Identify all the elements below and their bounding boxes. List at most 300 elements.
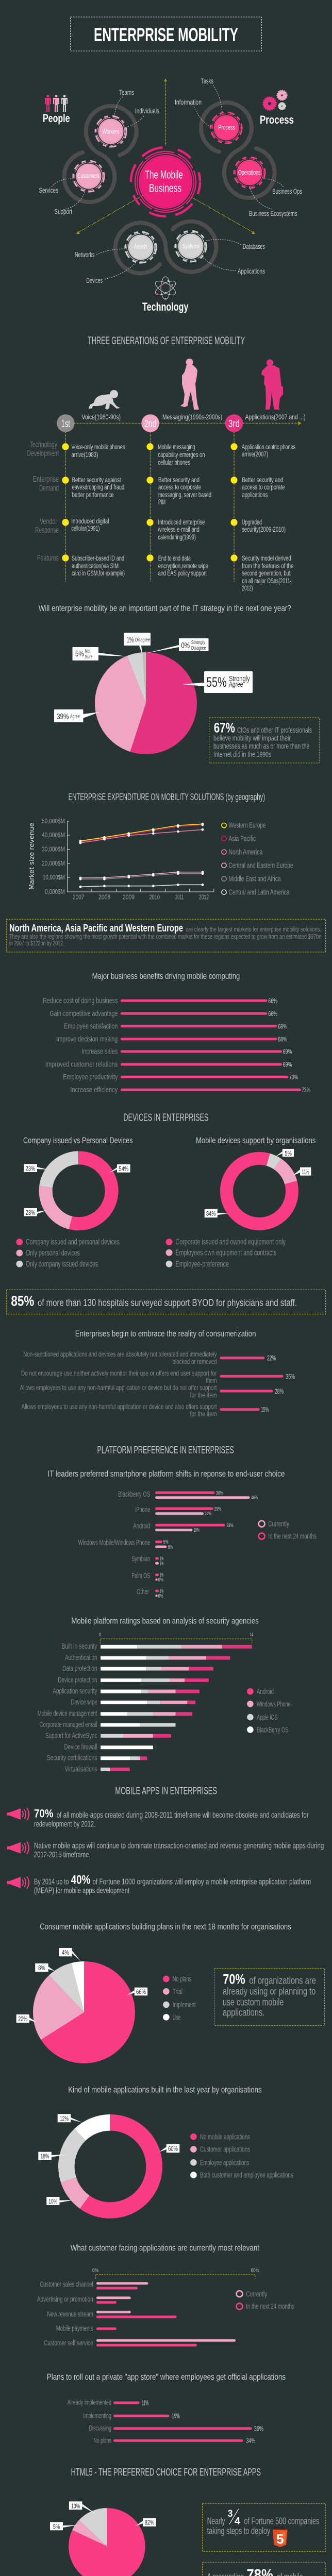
callout: 23% lower xyxy=(24,1208,47,1216)
bar chart: 68% xyxy=(278,1022,287,1030)
callout: 54%: 54% xyxy=(119,1165,129,1173)
icon: megaphone 2 xyxy=(7,1842,29,1854)
technology development text xyxy=(71,443,295,466)
panel: devices in enterprises xyxy=(6,1112,326,1314)
stacked bar chart xyxy=(38,1632,253,1773)
callout box: 70%: 70% xyxy=(223,1972,245,1987)
bar chart: app store: 36% xyxy=(254,2425,263,2433)
bar chart xyxy=(20,1350,295,1418)
row labels: Demand xyxy=(39,484,59,493)
features text: on all major OSes(2011- xyxy=(242,577,292,585)
legend: plans xyxy=(163,1975,196,2022)
bar chart: Do not encourage use,neither actively monitor their use or offers end user support for xyxy=(21,1369,217,1377)
grouped bar chart: 24% xyxy=(205,1511,211,1517)
callout: 66% xyxy=(127,1988,147,1996)
callout: 8%: 8% xyxy=(38,1964,45,1972)
legend: plans: Implement xyxy=(173,2001,196,2009)
icon: young man xyxy=(180,359,199,410)
features text: card in GSM,for example) xyxy=(72,569,125,577)
panel: three generations xyxy=(27,335,305,592)
callout box: three quarters: Nearly xyxy=(207,2516,225,2526)
generation: 2nd xyxy=(141,413,222,432)
grouped bar chart: customer facing: Mobile payments xyxy=(56,2324,93,2333)
callout: 39%: 39% xyxy=(57,713,69,721)
technology development text: Application centric phones xyxy=(242,443,295,451)
legend: currently vs next xyxy=(236,2290,294,2311)
legend: left: Only company issued devices xyxy=(26,1260,98,1268)
stacked bar chart: Virtualisations xyxy=(65,1765,97,1773)
icon: businessman xyxy=(261,360,283,410)
pie chart: html5 xyxy=(88,2527,126,2565)
callout: 0% xyxy=(146,638,208,653)
bar chart: 68% xyxy=(278,1035,287,1043)
grouped bar chart: Palm OS xyxy=(131,1571,150,1580)
technology development text: arrive(1983) xyxy=(71,450,98,459)
bar chart: 70% xyxy=(289,1073,298,1081)
diagram labels: Applications xyxy=(238,267,265,275)
callout: 82% xyxy=(136,2518,156,2527)
features text xyxy=(72,554,294,592)
icon: html5 logo xyxy=(273,2527,288,2547)
bar chart: app store: No plans xyxy=(94,2436,111,2444)
callout: 23% upper xyxy=(24,1164,47,1172)
diagram labels: Devices xyxy=(87,276,103,284)
node: systems xyxy=(175,231,206,262)
callout: 0%: 0% xyxy=(181,641,190,650)
callout: 39%: Agree xyxy=(70,714,79,720)
chart legend: North America xyxy=(229,848,263,856)
panel: platform preference xyxy=(38,1445,317,1773)
callout: 60%: 60% xyxy=(168,2145,178,2153)
features text: 2012) xyxy=(242,584,253,592)
subheading: customer facing: What customer facing applications are currently most relevant xyxy=(71,2243,259,2252)
features text: Subscriber-based ID and xyxy=(72,554,124,562)
callout: 22%: 22% xyxy=(18,2015,28,2023)
bar chart: for the item xyxy=(190,1391,217,1399)
panel: mobile business diagram xyxy=(39,77,302,313)
callout box: 70%: applications. xyxy=(223,2008,264,2019)
grouped bar chart: Symbian xyxy=(131,1555,150,1564)
bar chart: Improved customer relations xyxy=(45,1061,118,1069)
bar chart: 66% xyxy=(268,1010,277,1018)
row labels: Development xyxy=(27,449,59,458)
row labels: Vendor xyxy=(40,517,57,526)
legend: kinds: Customer applications xyxy=(200,2145,250,2154)
grouped bar chart: customer facing: Customer self service xyxy=(44,2338,93,2347)
stacked bar chart: 0 xyxy=(99,1632,101,1638)
diagram labels: Tasks xyxy=(201,77,213,85)
line chart: 10,000$M xyxy=(43,873,65,881)
grouped bar chart: 46% xyxy=(251,1495,258,1501)
vendor response text xyxy=(71,517,286,541)
callout: 5% xyxy=(50,2522,78,2530)
diagram labels: Business Ops xyxy=(272,187,302,195)
panel: html5 xyxy=(6,2467,326,2576)
bar chart: app store: 11% xyxy=(142,2399,148,2407)
enterprise demand text: access to corporate xyxy=(242,483,285,491)
technology development text: Mobile messaging xyxy=(158,443,195,451)
bar chart: Non-sanctioned applications and devices are absolutely not tolerated and immediately xyxy=(23,1350,217,1358)
callout: 82%: 82% xyxy=(144,2519,155,2527)
grouped bar chart: customer facing: 60% xyxy=(251,2268,259,2274)
heading: MOBILE APPS IN ENTERPRISES xyxy=(115,1785,217,1797)
grouped bar chart: 0% xyxy=(158,1594,163,1599)
grouped bar chart: 1% xyxy=(160,1572,163,1578)
enterprise demand text: Better security and xyxy=(158,476,200,484)
grouped bar chart: 30% xyxy=(216,1490,223,1496)
legend: right: Employees own equipment and contracts xyxy=(175,1248,276,1257)
bar chart: 35% xyxy=(286,1372,295,1380)
legend: kinds xyxy=(190,2132,293,2180)
callout: 5%: 5% xyxy=(75,650,84,658)
legend: left: Company issued and personal devices xyxy=(26,1238,120,1247)
bar chart: app store: 34% xyxy=(246,2437,255,2445)
people loop xyxy=(64,106,137,202)
bar chart: 22% xyxy=(267,1354,276,1362)
legend: right xyxy=(166,1238,286,1268)
callout box: 70% xyxy=(214,1969,325,2025)
title xyxy=(70,17,262,51)
chart legend: Central and Latin America xyxy=(229,888,290,896)
grouped bar chart: Blackberry OS xyxy=(118,1490,150,1499)
stacked bar chart: Data protection xyxy=(62,1664,97,1673)
gears icon xyxy=(263,91,287,110)
enterprise demand text: Better security against xyxy=(72,476,121,484)
bar chart: 66% xyxy=(268,997,277,1005)
bar chart: Allows employees to use any non-harmful application or device but do not offer support xyxy=(20,1383,217,1392)
line chart xyxy=(28,817,214,901)
panel: business benefits xyxy=(43,972,310,1094)
grouped bar chart: customer facing: 0% xyxy=(92,2268,98,2274)
legend: platforms: Android xyxy=(257,1687,274,1696)
grouped bar chart: 1% xyxy=(160,1589,163,1594)
callout: 10% xyxy=(46,2197,74,2205)
bar chart: Allows employees to use any non-harmful application or device and also offers support xyxy=(22,1402,217,1411)
grouped bar chart: iPhone xyxy=(135,1505,150,1514)
technology development text: capability emerges on xyxy=(158,450,205,459)
callout: 1% xyxy=(124,633,151,654)
callout: 60% xyxy=(159,2144,179,2153)
diagram labels: Support xyxy=(55,207,72,215)
fact: 40% xyxy=(34,1873,311,1895)
node: workers: Workers xyxy=(103,127,120,135)
generation: 2nd: Messaging(1990s-2000s) xyxy=(162,413,222,421)
callout: 13%: 13% xyxy=(71,2502,80,2510)
bar chart: Employee productivity xyxy=(63,1073,118,1081)
legend: kinds: No mobile applications xyxy=(200,2132,250,2141)
callout box: largest markets xyxy=(6,919,326,952)
callout box: largest markets: North America, Asia Pacific and Western Europe xyxy=(9,923,183,934)
line chart: 40,000$M xyxy=(42,831,65,839)
callout: 55%: Strongly xyxy=(229,674,250,683)
bar chart: Employee satisfaction xyxy=(64,1022,118,1030)
callout: 4%: 4% xyxy=(62,1948,69,1956)
callout: 54% xyxy=(110,1164,130,1173)
node: assets xyxy=(125,232,156,263)
diagram labels: Business Ecosystems xyxy=(249,209,297,217)
generation: 3rd xyxy=(225,413,305,432)
vendor response text: cellular(1991) xyxy=(71,524,99,532)
panel: enterprise expenditure xyxy=(6,792,326,952)
panel: IT strategy survey xyxy=(39,603,319,763)
enterprise demand text: better performance xyxy=(72,490,114,499)
legend: platforms xyxy=(247,1687,291,1734)
vendor response text: Introduced enterprise xyxy=(158,518,205,526)
node: process: Process xyxy=(218,124,235,131)
callout: 12%: 12% xyxy=(60,2114,69,2122)
callout box: three quarters: 4 xyxy=(235,2516,240,2527)
diagram labels: Teams xyxy=(119,88,134,96)
fact: native apps: 2012-2015 timeframe. xyxy=(34,1851,90,1859)
node: customers xyxy=(73,161,104,192)
callout: 66%: 66% xyxy=(136,1988,146,1996)
grouped bar chart: 5% xyxy=(163,1539,169,1545)
node: operations: Operations xyxy=(238,168,261,176)
icon: html5 logo: 5 xyxy=(276,2531,284,2547)
line chart: 2011 xyxy=(175,893,184,901)
callout: 0%: Strongly xyxy=(191,639,206,646)
callout: 1%: 1% xyxy=(127,636,134,645)
technology development text: cellular phones xyxy=(158,458,190,466)
arrow: lower right xyxy=(192,197,255,234)
diagram labels: Networks xyxy=(75,250,95,259)
grouped bar chart: Other xyxy=(137,1587,149,1596)
callout: 12% xyxy=(58,2114,82,2123)
fact: 70%: redevelopment by 2012. xyxy=(34,1820,95,1829)
bar chart: for the item xyxy=(190,1410,217,1418)
bar chart: 15% xyxy=(261,1405,269,1414)
enterprise demand text: access to corporate xyxy=(158,483,201,491)
row labels xyxy=(27,440,59,563)
icon: html5 logo: HTML xyxy=(274,2527,286,2530)
features text: Security model derived xyxy=(242,554,291,562)
generation: 3rd: Applications(2007 and ...) xyxy=(245,413,305,421)
diagram labels: Individuals xyxy=(135,107,159,115)
callout: 5%: 5% xyxy=(285,1149,292,1157)
grouped bar chart: 1% xyxy=(160,1556,163,1562)
features text: encryption,remote wipe xyxy=(158,562,208,570)
row labels: Response xyxy=(35,526,59,535)
features text: End to end data xyxy=(158,554,191,562)
callout: 11%: 11% xyxy=(302,1168,309,1176)
technology label: Technology xyxy=(142,300,189,313)
fact: 40%: By 2014 up to xyxy=(34,1877,69,1886)
heading: Major business benefits driving mobile computing xyxy=(92,972,240,981)
bar chart: them xyxy=(206,1376,217,1384)
bar chart: app store: 19% xyxy=(172,2412,180,2420)
grouped bar chart: customer facing: Advertising or promotion xyxy=(37,2295,93,2304)
callout: 55% xyxy=(182,671,253,693)
legend: left xyxy=(16,1238,120,1268)
bar chart: Increase sales xyxy=(81,1048,118,1056)
heading: DEVICES IN ENTERPRISES xyxy=(123,1112,208,1124)
callout box: largest markets: in 2007 to $122bn by 2012. xyxy=(9,939,64,947)
callout: 18% xyxy=(38,2152,66,2160)
grouped bar chart: Windows Mobile/Windows Phone xyxy=(78,1538,150,1547)
callout box: three quarters xyxy=(203,2503,325,2551)
callout: 23% lower: 23% xyxy=(26,1209,36,1216)
bar chart: Gain competitive advantage xyxy=(49,1010,118,1018)
bar chart: app store xyxy=(68,2399,263,2445)
callout box: three quarters: taking steps to deploy xyxy=(207,2526,270,2536)
subheading: security ratings: Mobile platform ratings based on analysis of security agencies xyxy=(71,1616,259,1626)
grouped bar chart: Android xyxy=(133,1522,150,1531)
donut chart: company vs personal xyxy=(46,1158,112,1224)
process label: Process xyxy=(260,113,294,126)
line chart: 2010 xyxy=(150,893,160,901)
grouped bar chart: customer facing: Customer sales channel xyxy=(40,2280,93,2289)
features text: authentication(via SIM xyxy=(72,562,119,570)
icon: megaphone 1 xyxy=(7,1808,29,1820)
row labels: Technology xyxy=(30,440,57,449)
enterprise demand text: Better security and xyxy=(242,476,283,484)
pie chart: building plans xyxy=(59,1987,109,2038)
stacked bar chart: Device protection xyxy=(58,1675,97,1684)
legend: left: Only personal devices xyxy=(26,1249,80,1258)
grouped bar chart xyxy=(78,1490,258,1599)
legend: plans: Use xyxy=(173,2013,180,2022)
grouped bar chart: 19% xyxy=(193,1528,200,1533)
callout box: 67% xyxy=(209,718,319,763)
callout: 23% upper: 23% xyxy=(26,1164,36,1172)
legend: platforms: Windows Phone xyxy=(257,1700,291,1708)
donut chart: device support xyxy=(227,1158,292,1224)
callout: 22% xyxy=(16,2014,37,2023)
people icon xyxy=(45,95,68,112)
callout box: 67%: believe mobility will impact their xyxy=(213,734,291,743)
callout: 84%: 84% xyxy=(206,1210,216,1217)
line chart: 2008 xyxy=(98,893,110,901)
chart legend: Western Europe xyxy=(229,821,266,830)
features text: from the features of the xyxy=(242,562,294,570)
stacked bar chart: Authentication xyxy=(65,1653,97,1662)
features text: second generation, but xyxy=(242,569,290,577)
row labels: Enterprise xyxy=(33,475,59,484)
diagram labels: Databases xyxy=(243,242,265,250)
legend: plans: Trial xyxy=(173,1988,182,1996)
enterprise demand text: eavesdropping and fraud, xyxy=(72,483,126,491)
grouped bar chart: 1% xyxy=(160,1561,163,1567)
chart legend: Asia Pacific xyxy=(229,834,256,843)
fact: native apps xyxy=(34,1842,324,1859)
line chart: 20,000$M xyxy=(42,859,65,867)
bar chart: Reduce cost of doing business xyxy=(43,997,118,1005)
node: the mobile business: Business xyxy=(149,181,181,194)
chart legend xyxy=(222,821,293,896)
line chart: 2007 xyxy=(73,893,85,901)
stacked bar chart: Support for ActiveSync xyxy=(45,1731,97,1740)
bar chart: 69% xyxy=(283,1048,292,1056)
chart legend: Central and Eastern Europe xyxy=(229,861,293,870)
bar chart: app store: Implementing xyxy=(83,2412,111,2419)
callout: 8% xyxy=(35,1963,55,1972)
node: workers xyxy=(95,116,126,147)
node: the mobile business xyxy=(131,147,200,216)
arrow: up xyxy=(164,78,167,145)
legend xyxy=(259,1520,317,1540)
callout: 5% xyxy=(275,1149,294,1157)
legend: right: Employee-preference xyxy=(175,1260,229,1268)
panel: mobile apps in enterprises xyxy=(7,1785,325,2445)
generation: 1st: 1st xyxy=(61,418,70,430)
timeline dots xyxy=(62,443,238,562)
technology development text: Voice-only mobile phones xyxy=(71,443,125,451)
callout: 10%: 10% xyxy=(48,2197,58,2205)
title: ENTERPRISE MOBILITY xyxy=(94,24,238,45)
callout box: 85%: 85% xyxy=(11,1293,34,1309)
legend: kinds: Employee applications xyxy=(200,2158,249,2167)
line chart: 0,000$M xyxy=(45,888,65,895)
node: process xyxy=(211,112,242,143)
callout: 13% xyxy=(69,2501,96,2514)
node: systems: Systems xyxy=(182,242,200,250)
leader lines xyxy=(52,85,284,279)
stacked bar chart: Device wipe xyxy=(71,1698,97,1706)
bar chart: Improve decision making xyxy=(56,1035,118,1043)
callout box: 78% xyxy=(203,2562,325,2576)
legend: currently vs next: Currently xyxy=(246,2290,268,2298)
enterprise demand text: messaging, server based xyxy=(158,490,211,499)
features text: and EAS policy support xyxy=(158,569,207,577)
technology loop xyxy=(115,222,216,273)
fact: 40%: 40% xyxy=(71,1873,90,1887)
stacked bar chart: Application security xyxy=(53,1687,97,1696)
bar chart: 69% xyxy=(283,1061,292,1069)
icon: megaphone 3 xyxy=(7,1876,29,1889)
legend: currently vs next: In the next 24 months xyxy=(246,2302,294,2311)
technology development text: arrive(2007) xyxy=(242,450,268,458)
callout: 5%: Not xyxy=(85,648,90,654)
legend: platforms: Apple iOS xyxy=(257,1713,277,1722)
grouped bar chart: 0% xyxy=(158,1578,163,1583)
heading: PLATFORM PREFERENCE IN ENTERPRISES xyxy=(97,1445,234,1456)
grouped bar chart: 33% xyxy=(226,1523,234,1529)
generation: 1st xyxy=(57,413,121,432)
arrow: lower left xyxy=(76,195,144,234)
callout box: 67%: 67% xyxy=(214,720,235,736)
legend: plans: No plans xyxy=(173,1975,191,1984)
node: assets: Assets xyxy=(134,242,147,250)
line chart: 30,000$M xyxy=(42,845,65,853)
fact: 70%: 70% xyxy=(34,1807,54,1820)
grouped bar chart: customer facing xyxy=(37,2268,259,2347)
stacked bar chart: Security certifications xyxy=(47,1754,97,1762)
fact: 70% xyxy=(34,1807,309,1829)
bar chart: app store: Already implemented xyxy=(68,2399,111,2406)
vendor response text: security(2009-2010) xyxy=(242,525,286,533)
panel: consumerization xyxy=(20,1329,295,1418)
heading: Enterprises begin to embrace the reality of consumerization xyxy=(75,1329,256,1338)
callout box: 70%: use custom mobile xyxy=(223,1997,284,2008)
callout: 18%: 18% xyxy=(40,2153,49,2160)
callout: 5%: Sure xyxy=(85,654,93,660)
bar chart: Increase efficiency xyxy=(70,1086,118,1094)
enterprise demand text: PIM xyxy=(158,498,165,506)
callout box: 67%: Internet did in the 1990s. xyxy=(213,750,273,759)
process loop xyxy=(201,103,275,198)
enterprise demand text xyxy=(72,476,285,506)
line chart: Market size revenue xyxy=(28,823,36,890)
callout: 0%: Disagree xyxy=(191,645,206,651)
bar chart xyxy=(43,997,310,1094)
node: customers: Customers xyxy=(77,172,99,180)
callout: 4% xyxy=(59,1948,81,1961)
stacked bar chart: 14 xyxy=(250,1632,253,1638)
diagram labels: Services xyxy=(39,186,58,194)
callout: 5%: 5% xyxy=(53,2522,60,2530)
callout: 39% xyxy=(54,709,99,722)
generation: 2nd: 2nd xyxy=(144,418,156,430)
